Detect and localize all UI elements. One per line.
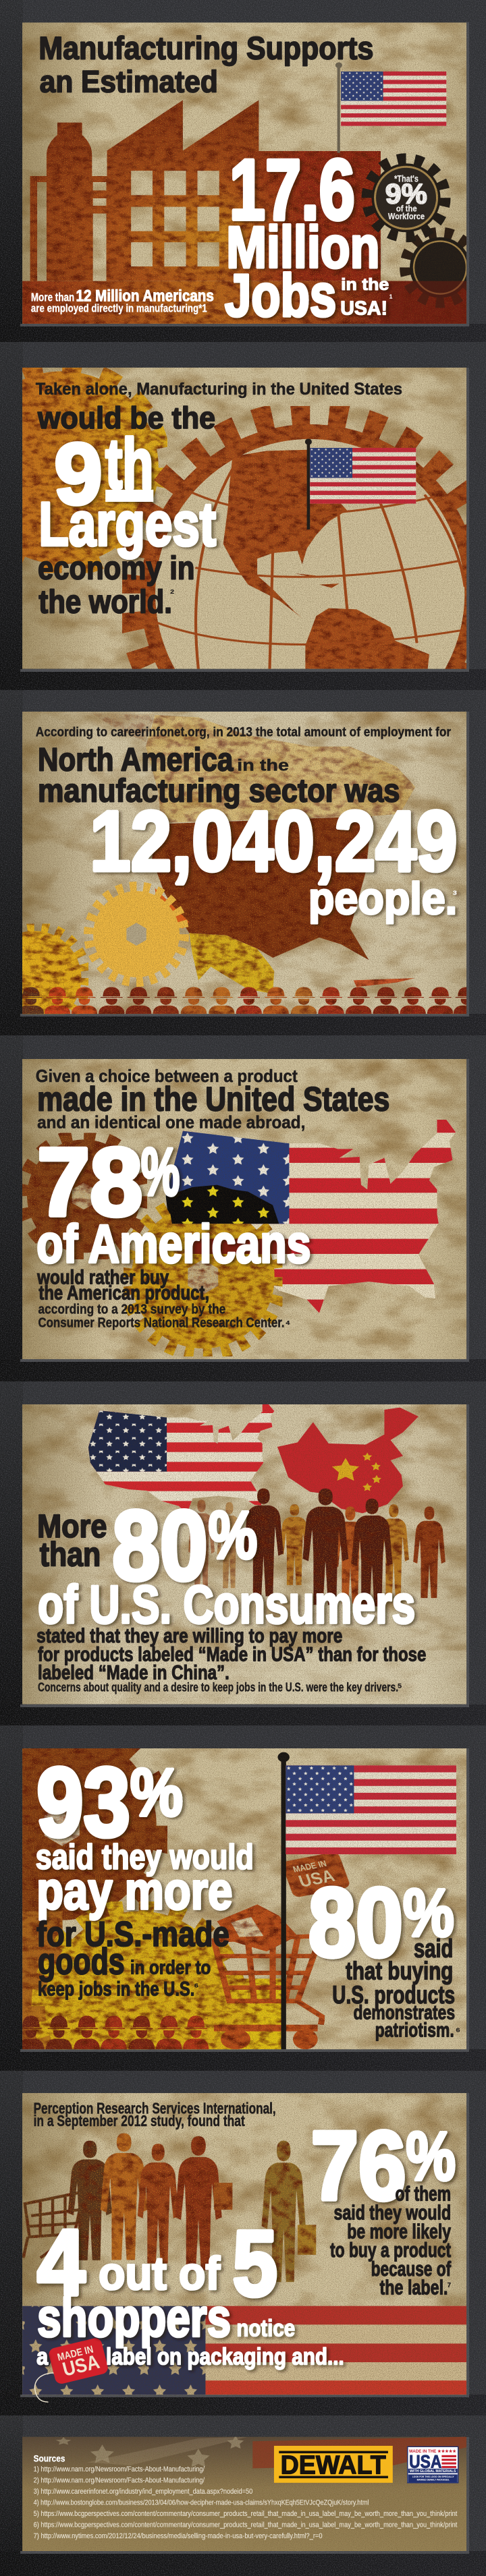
text: buying us products demonstrates patriotism: 6 [456,2028,460,2034]
text: for us-made goods: keep jobs in the U.S. [38,1977,194,2000]
icon: made in usa tag: USA [296,1866,338,1891]
big number: 80 percent of us consumers: % [209,1497,257,1573]
big number: 9th largest [38,424,216,559]
big number: 12,040,249 people: 3 [453,890,457,896]
big number: 80 percent: % [403,1874,454,1951]
icon: hard-hat workers [18,2015,209,2049]
icon: flag-filled map of usa [164,1118,457,1315]
text: of them more likely to buy: because of [371,2258,452,2281]
text: willing to pay more [36,1625,426,1694]
icon: large yellow gear [89,887,189,981]
text: would be the: would be the [37,401,215,435]
icon: map of china with flag stars [277,1408,418,1513]
text: sources list: 3) http://www.careerinfonet.org/industry/ind_employment_data.aspx?nodeid=50 [34,2488,252,2496]
text: would rather buy the american product: 4 [286,1320,290,1326]
text: economy in the world [38,550,194,620]
icon: made in usa tag: MADE IN [292,1859,328,1874]
icon: black gear with workforce share: 9% [385,178,427,210]
icon: lower black gear [405,233,475,303]
big number: 4 out of 5 shoppers notice [36,2210,344,2370]
text: 12 million employed directly: More than [31,291,74,304]
text: for us-made goods: 6 [194,1983,198,1989]
big number: 93 percent said they would pay more: said they would [36,1838,254,1877]
text: given a choice [36,1066,389,1132]
heading: manufacturing supports an estimated [38,30,373,99]
panel: 78 percent of americans [22,1059,466,1359]
big number: 76 percent: 76 [311,2111,406,2221]
text: sources list [34,2454,457,2540]
heading: north america in the manufacturing sector was: in the [237,757,289,774]
big number: 4 out of 5 shoppers notice: a [36,2344,49,2370]
logo: made in the usa with global materials: WITH GLOBAL MATERIALS [410,2469,456,2473]
icon: crowd silhouettes [188,1489,446,1607]
big number: 17.6 million jobs in the USA: Million [226,215,380,281]
icon: shopping cart [214,1904,323,2049]
logo: made in the usa with global materials: MARKED DEWALT PACKAGES. [417,2479,450,2482]
text: 12 million employed directly: are employed directly in manufacturing*1 [31,302,207,315]
text: of them more likely to buy: be more likely [347,2220,451,2243]
heading: manufacturing supports an estimated: an Estimated [40,64,218,99]
big number: 17.6 million jobs in the USA: USA! [340,298,387,319]
big number: 93 percent said they would pay more [36,1747,254,1920]
icon: faded flag background [56,2436,466,2468]
icon: yellow gear lower left [22,1906,281,2105]
big number: 93 percent said they would pay more: 93 [36,1747,130,1856]
text: perception research services: in a September 2012 study, found that [34,2112,245,2129]
text: sources list: 4) http://www.bostonglobe.com/business/2013/04/06/how-decipher-made-usa-claims/sYhxqKEqh5EtVJcQeZQjuK/story.html [34,2498,369,2507]
big number: 78 percent of americans: % [141,1134,180,1209]
icon: black gear with workforce share: *That's [394,173,418,184]
icon: made in usa tag [281,1851,351,1898]
text: of them more likely to buy: of them [395,2182,451,2206]
logo: made in the usa with global materials [408,2446,458,2483]
big number: 76 percent: % [406,2118,456,2195]
big number: 80 percent: 80 [308,1868,403,1977]
icon: globe disc [155,439,464,669]
icon: globe continents [223,450,429,669]
icon: small left gear [0,926,86,1030]
text: of them more likely to buy [330,2182,452,2299]
text: sources list: Sources [34,2454,65,2464]
logo: made in the usa with global materials: USA [409,2451,441,2471]
text: economy in the world: 2 [170,589,174,595]
panel: 12,040,249 people [0,712,479,1030]
logo: made in the usa with global materials: MADE IN THE ★★★★★ [409,2449,457,2454]
panel: 93 percent and 80 percent [0,1725,466,2105]
text: of them more likely to buy: the label. [380,2276,448,2299]
big number: 17.6 million jobs in the USA [225,142,393,328]
icon: american flag on globe [305,438,416,529]
heading: north america in the manufacturing sector was [38,741,400,809]
text: perception research services [34,2100,276,2129]
text: would rather buy the american product: Consumer Reports National Research Center. [38,1315,285,1330]
big number: 4 out of 5 shoppers notice: out of [99,2248,221,2299]
text: perception research services: Perception Research Services International, [34,2100,276,2117]
text: would rather buy the american product: according to a 2013 survey by the [38,1301,225,1317]
icon: flag-filled map of usa [87,1403,276,1516]
text: for us-made goods [36,1915,230,2000]
text: more than [37,1508,107,1573]
text: more than: than [40,1536,101,1573]
icon: black gear with workforce share: of the [396,204,417,214]
icon: large rust gear [122,406,467,669]
text: willing to pay more: labeled “Made in China”. [38,1662,230,1684]
icon: map of north america [93,714,415,994]
text: would rather buy the american product: would rather buy [36,1265,169,1288]
icon: gold gear [0,366,163,569]
icon: rusted factory silhouette [30,100,381,281]
icon: globe grid lines [138,469,466,669]
heading: north america in the manufacturing sector was: North America [38,741,234,778]
icon: rust gear upper left [0,1725,163,1927]
icon: rust gear [23,1135,144,1257]
big number: 4 out of 5 shoppers notice: 5 [232,2211,277,2316]
big number: 17.6 million jobs in the USA: Jobs [225,262,336,328]
panel: 17.6 million jobs [22,22,475,328]
text: buying us products demonstrates patriotism: said [414,1934,453,1963]
big number: 9th largest: 9 [54,425,103,522]
text: more than: More [37,1508,107,1545]
icon: faded flag band [22,2306,466,2395]
big number: 80 percent of us consumers [38,1491,415,1634]
big number: 9th largest: Largest [38,490,216,559]
big number: 9th largest: th [105,424,153,503]
big number: 78 percent of americans [36,1128,311,1274]
text: willing to pay more: 5 [398,1683,402,1690]
big number: 80 percent of us consumers: 80 [112,1491,208,1601]
big number: 93 percent said they would pay more: pay more [36,1861,232,1920]
text: economy in the world: the world. [38,583,172,620]
icon: red made in usa tag: USA [60,2351,102,2381]
big number: 78 percent of americans: 78 [37,1128,142,1236]
big number: 4 out of 5 shoppers notice: label on packaging and... [106,2344,344,2370]
icon: bottom rust band [22,281,466,324]
big number: 17.6 million jobs in the USA: 17.6 [230,142,355,237]
icon: row of hard-hat workers [18,987,479,1014]
icon: red made in usa tag: MADE IN [56,2344,94,2364]
big number: 17.6 million jobs in the USA: 1 [389,294,393,300]
text: given a choice: and an identical one made abroad, [37,1112,305,1132]
icon: dark stripe over gear [186,1239,292,1254]
panel: 9th largest economy [22,368,467,669]
big number: 12,040,249 people [90,794,457,924]
text: sources list: 2) http://www.nam.org/Newsroom/Facts-About-Manufacturing/ [34,2477,205,2484]
big number: 4 out of 5 shoppers notice: notice [236,2316,295,2341]
icon: shoppers silhouettes with cart [23,2133,316,2282]
text: 12 million employed directly [31,287,214,315]
big number: 93 percent said they would pay more: % [130,1754,183,1830]
icon: black gear with workforce share: Workforce [388,211,425,221]
icon: american flag on pole [335,62,446,153]
panel: 4 out of 5 shoppers [22,2093,466,2405]
text: given a choice: Given a choice between a product [36,1066,298,1086]
text: economy in the world: economy in [38,550,194,586]
icon: gold gear [127,1201,279,1353]
logo: dewalt: DEWALT [281,2451,386,2480]
icon: black gear with workforce share [367,159,446,237]
big number: 4 out of 5 shoppers notice: shoppers [37,2287,231,2348]
big number: 4 out of 5 shoppers notice: 4 [37,2210,85,2314]
text: buying us products demonstrates patriotism [332,1934,460,2041]
text: sources list: 7) http://www.nytimes.com/2012/12/24/business/media/selling-made-in-usa-but-very-carefully.html?_r=0 [34,2532,323,2540]
text: for us-made goods: in order to [130,1957,211,1978]
big number: 17.6 million jobs in the USA: in the [341,275,389,294]
icon: flag pole and american flag [277,1752,456,2049]
icon: red made in usa tag [26,2337,113,2405]
panel: 80 percent of us consumers [22,1403,466,1705]
text: of them more likely to buy: 7 [448,2282,452,2289]
logo: made in the usa with global materials: LOOK FOR THIS LOGO ON SPECIALLY [412,2475,454,2478]
text: 12 million employed directly: 12 Million Americans [76,287,214,305]
text: would rather buy the american product: the American product, [38,1281,209,1304]
text: for us-made goods: for U.S.-made [36,1915,230,1954]
panel: sources [22,2436,466,2551]
text: sources list: 1) http://www.nam.org/Newsroom/Facts-About-Manufacturing/ [34,2465,205,2473]
text: would rather buy the american product [36,1265,290,1330]
text: for us-made goods: goods [38,1941,125,1982]
